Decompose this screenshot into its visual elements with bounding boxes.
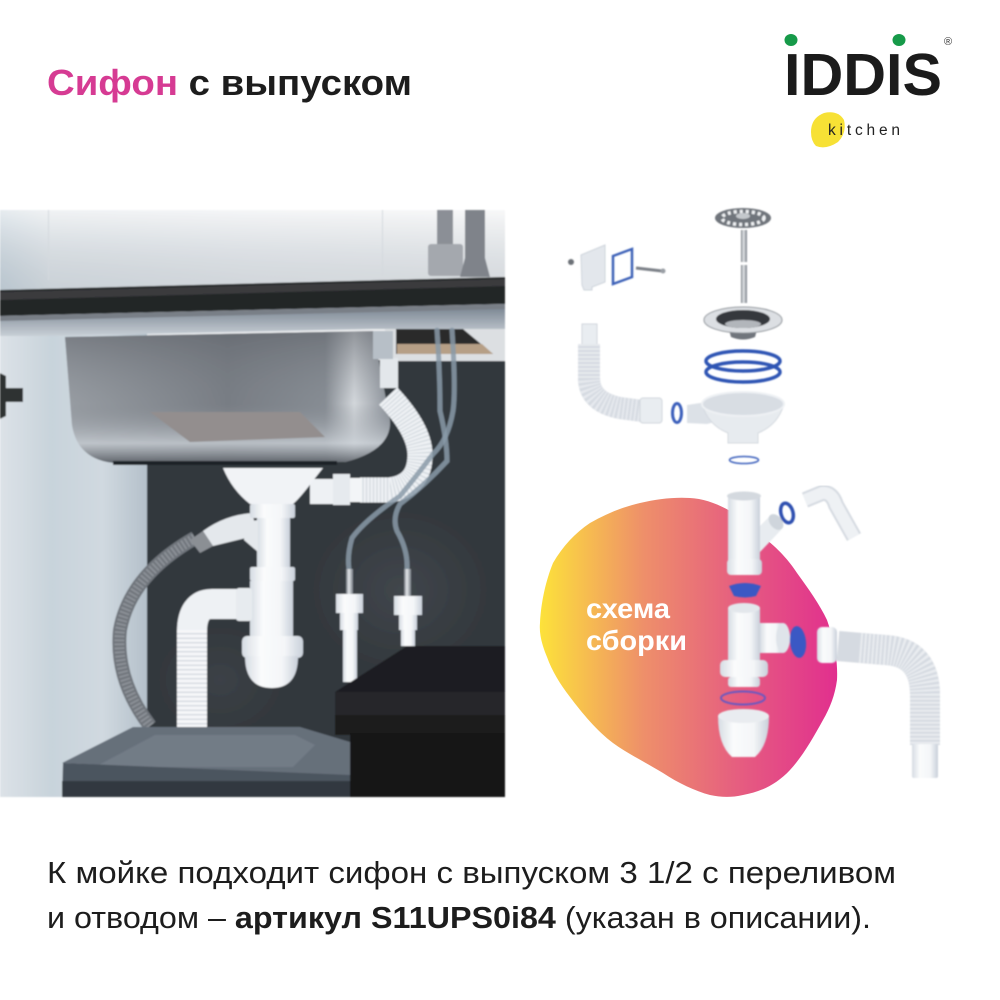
countertop: [0, 277, 505, 336]
blue gaskets: [706, 351, 780, 382]
blue gasket side: [788, 625, 808, 659]
blue gasket upper: [729, 583, 761, 598]
strainer and stem: [715, 208, 771, 303]
drain outlet nut: [310, 474, 362, 505]
cup: [718, 709, 769, 757]
faucet: [428, 210, 490, 277]
water supply hoses: [348, 330, 454, 569]
steel sink bowl: [65, 331, 390, 465]
logo: IDDIS kitchen: ®: [944, 36, 952, 48]
cabinet side wall: [0, 330, 147, 797]
logo: IDDIS kitchen: IDDIS: [784, 42, 942, 108]
photo: sink with siphon installed: [0, 210, 505, 797]
description text: К мойке подходит сифон с выпуском 3 1/2 с переливом: [47, 855, 896, 890]
exploded diagram: lower parts: [718, 492, 938, 778]
trap body: [720, 603, 790, 687]
drain hose corrugated: [360, 331, 420, 490]
outlet corrugated elbow: [817, 627, 938, 778]
plastic bowl: [687, 392, 784, 443]
grey tray: [62, 727, 350, 797]
siphon: [192, 468, 362, 727]
blob label: сборки: [586, 625, 687, 656]
small blue rings: [672, 404, 758, 464]
logo: IDDIS kitchen: kitchen: [828, 122, 900, 139]
water supply fittings: [336, 569, 422, 682]
logo: IDDIS kitchen: [784, 34, 952, 147]
description text: и отводом – артикул S11UPS0i84 (указан в описании).: [47, 900, 858, 935]
blob label: схема: [586, 593, 670, 624]
overflow plate with gasket and screw: [568, 245, 666, 290]
drain bowl: [223, 468, 323, 504]
overflow corrugated pipe: [582, 324, 662, 423]
bottle trap body: [242, 504, 303, 688]
upper tee: [727, 492, 786, 575]
pink ring: [721, 692, 765, 704]
grey washing machine hose: [119, 513, 258, 726]
black bin: [335, 646, 505, 797]
hinge: [0, 373, 23, 419]
dark back wall: [147, 360, 505, 797]
gradient blob: [540, 498, 837, 797]
exploded diagram: upper parts: [568, 208, 784, 464]
top elbow with ring: [779, 493, 854, 537]
steel flange: [704, 307, 782, 340]
opening behind sink: [385, 329, 505, 361]
outlet corrugated pipe: [192, 588, 252, 727]
title: Сифон с выпуском: [47, 62, 412, 103]
